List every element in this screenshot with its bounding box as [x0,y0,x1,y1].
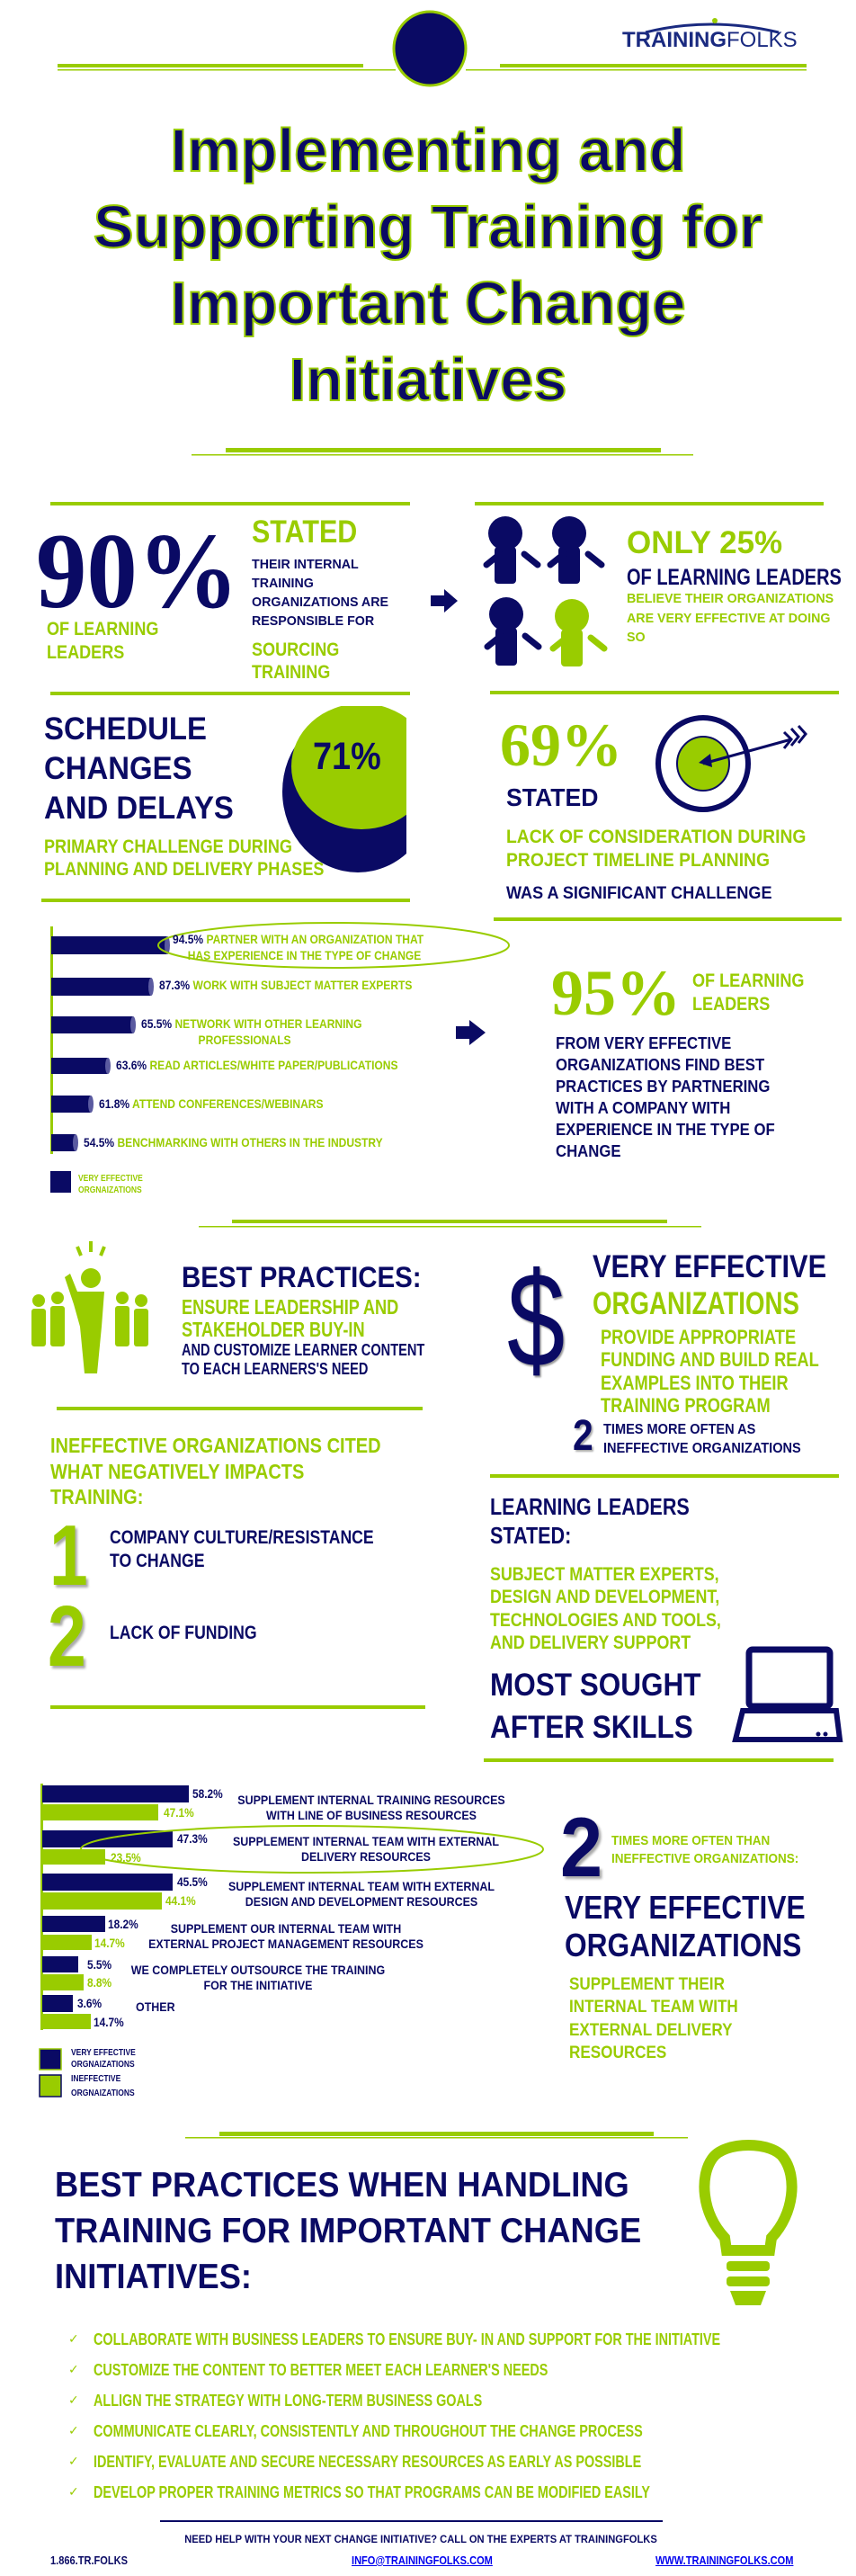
text: provide funding: EXAMPLES INTO THEIR [601,1372,789,1394]
text: find best practices: CHANGE [556,1142,621,1160]
text: times more often than: INEFFECTIVE ORGANIZATIONS: [611,1851,798,1866]
text: of learning leaders: LEADERS [47,642,124,663]
text: lack of consideration: PROJECT TIMELINE PLANNING [506,850,770,871]
text: 23.5% [111,1850,141,1865]
heading: best practices when handling: BEST PRACTICES WHEN HANDLING [55,2166,629,2205]
text: 8.8% [87,1975,111,1990]
text: times more often than [611,1833,798,1866]
text: find best practices: PRACTICES BY PARTNERING [556,1078,770,1096]
bar chart 2 category labels [131,1793,505,2014]
text: believe: BELIEVE THEIR ORGANIZATIONS [627,591,834,606]
bar chart 2 value labels [77,1786,223,2029]
title underline [192,448,693,455]
text: internal training: ORGANIZATIONS ARE [252,595,388,610]
text: 14.7% [94,2015,124,2029]
text: find best practices: EXPERIENCE IN THE TYPE OF [556,1121,775,1139]
title: Supporting Training for [94,193,762,261]
text: find best practices: ORGANIZATIONS FIND BEST [556,1056,764,1074]
bar label 2: 87.3% WORK WITH SUBJECT MATTER EXPERTS [159,978,412,992]
text: supplement their: INTERNAL TEAM WITH [569,1998,738,2017]
legend text 2: ORGNAIZATIONS [71,2089,135,2098]
heading: learning leaders stated: STATED: [490,1522,571,1549]
text: skills list [490,1564,721,1653]
stat: 69%: 69% [500,711,622,779]
text: COLLABORATE WITH BUSINESS LEADERS TO ENSURE BUY- IN AND SUPPORT FOR THE INITIATIVE [94,2330,720,2348]
text: ensure leadership: ENSURE LEADERSHIP AND [182,1295,398,1319]
section lines [41,502,842,2139]
legend 2 [40,2049,61,2097]
icon: laptop [736,1650,840,1740]
bar label 3: PROFESSIONALS [199,1033,291,1047]
checklist [68,2330,720,2501]
heading: schedule changes: AND DELAYS [44,791,234,826]
icon: top navy circle [394,12,466,85]
text: primary challenge [44,836,324,880]
legend text 1: ORGNAIZATIONS [78,1185,142,1195]
text: company culture: COMPANY CULTURE/RESISTANCE [110,1527,374,1548]
heading: very effective organizations 2: ORGANIZATIONS [565,1927,801,1963]
text: times more often as [603,1422,801,1456]
text: find best practices: FROM VERY EFFECTIVE [556,1034,731,1052]
icon: dollar: $ [507,1244,565,1395]
heading: best practices when handling: INITIATIVES: [55,2258,252,2296]
text: ✓ [68,2424,79,2438]
heading: ineffective organizations: TRAINING: [50,1485,143,1508]
text: DELIVERY RESOURCES [301,1849,431,1864]
arrow 1 [431,589,458,613]
text: ✓ [68,2455,79,2469]
text: 58.2% [192,1786,223,1801]
text: internal training: THEIR INTERNAL [252,557,359,572]
heading: learning leaders stated [490,1493,690,1549]
text: ensure leadership [182,1295,398,1341]
text: believe [627,591,834,645]
text: stated: STATED [252,514,357,550]
text: times more often than: TIMES MORE OFTEN THAN [611,1833,770,1848]
text: ✓ [68,2332,79,2347]
text: times more often as: TIMES MORE OFTEN AS [603,1422,755,1437]
number 1: 1 [49,1507,88,1604]
text: DEVELOP PROPER TRAINING METRICS SO THAT PROGRAMS CAN BE MODIFIED EASILY [94,2483,650,2501]
text: internal training: RESPONSIBLE FOR [252,613,374,629]
heading: most sought after skills [490,1668,701,1745]
text: lack of funding: LACK OF FUNDING [110,1623,257,1643]
number 2 big: 2 [560,1800,602,1894]
text: provide funding: FUNDING AND BUILD REAL [601,1348,819,1371]
text: of learning leaders 3: OF LEARNING [692,970,804,991]
bar labels 1: HAS EXPERIENCE IN THE TYPE OF CHANGE [188,948,421,962]
text: believe: ARE VERY EFFECTIVE AT DOING [627,610,830,626]
text: ✓ [68,2485,79,2500]
text: FOR THE INITIATIVE [204,1978,312,1992]
text: ensure leadership: STAKEHOLDER BUY-IN [182,1318,365,1341]
footer email: INFO@TRAININGFOLKS.COM [352,2554,493,2567]
text: customize content: TO EACH LEARNERS'S NEED [182,1360,368,1378]
footer cta: NEED HELP WITH YOUR NEXT CHANGE INITIATIVE? CALL ON THE EXPERTS AT TRAININGFOLKS [184,2533,657,2545]
text: ✓ [68,2393,79,2408]
text: skills list: DESIGN AND DEVELOPMENT, [490,1587,719,1607]
text: internal training: TRAINING [252,576,314,591]
heading: learning leaders stated: LEARNING LEADERS [490,1493,690,1520]
text: customize content [182,1341,424,1378]
text: supplement their: SUPPLEMENT THEIR [569,1975,725,1994]
heading: very effective organizations 2 [565,1889,806,1963]
heading: schedule changes: CHANGES [44,751,192,786]
text: 14.7% [94,1936,125,1950]
title: Initiatives [289,346,567,414]
heading: schedule changes [44,711,234,826]
text: supplement their: EXTERNAL DELIVERY [569,2021,732,2040]
text: company culture [110,1527,374,1571]
bar label 6: 54.5% BENCHMARKING WITH OTHERS IN THE INDUSTRY [84,1135,383,1149]
text: 18.2% [108,1917,138,1931]
text: sourcing training: SOURCING [252,640,339,660]
title: Implementing and [170,117,686,184]
text: 3.6% [77,1996,102,2010]
footer line [160,2520,663,2522]
text: SUPPLEMENT INTERNAL TRAINING RESOURCES [237,1793,505,1807]
icon: people group [486,516,604,666]
legend 1 [50,1171,71,1193]
text: sourcing training [252,640,339,683]
text: DESIGN AND DEVELOPMENT RESOURCES [245,1894,477,1909]
text: ✓ [68,2363,79,2377]
text: find best practices: WITH A COMPANY WITH [556,1099,730,1117]
text: IDENTIFY, EVALUATE AND SECURE NECESSARY RESOURCES AS EARLY AS POSSIBLE [94,2453,641,2471]
text: 44.1% [165,1893,196,1908]
bar label 3: 65.5% NETWORK WITH OTHER LEARNING [141,1016,362,1031]
bar label 5: 61.8% ATTEND CONFERENCES/WEBINARS [99,1096,324,1111]
legend text 1 [78,1174,143,1195]
text: believe: SO [627,630,646,645]
legend text 2: INEFFECTIVE [71,2074,120,2084]
bar label 3 [141,1016,362,1047]
heading: organizations green: ORGANIZATIONS [593,1286,799,1321]
callout ellipse [158,923,509,968]
heading: schedule changes: SCHEDULE [44,711,207,747]
arrow 2 [456,1020,486,1045]
text: of learning leaders 3 [692,970,804,1015]
callout ellipse 2 [81,1826,543,1873]
text: skills list: AND DELIVERY SUPPORT [490,1632,691,1653]
pie label 71%: 71% [313,735,381,778]
footer phone: 1.866.TR.FOLKS [50,2554,128,2567]
title [94,117,762,414]
text: ALLIGN THE STRATEGY WITH LONG-TERM BUSINESS GOALS [94,2392,482,2410]
text: SUPPLEMENT INTERNAL TEAM WITH EXTERNAL [233,1834,499,1848]
bar chart 2 [40,1784,189,2030]
legend text 2: ORGNAIZATIONS [71,2060,135,2070]
bar labels 1 [173,932,424,962]
text: COMMUNICATE CLEARLY, CONSISTENTLY AND THROUGHOUT THE CHANGE PROCESS [94,2422,643,2440]
text: of learning leaders 3: LEADERS [692,994,770,1015]
text: skills list: TECHNOLOGIES AND TOOLS, [490,1610,721,1631]
text: SUPPLEMENT INTERNAL TEAM WITH EXTERNAL [228,1879,495,1893]
text: provide funding [601,1326,819,1417]
text: WE COMPLETELY OUTSOURCE THE TRAINING [131,1963,385,1977]
header lines [58,64,807,70]
heading: most sought after skills: AFTER SKILLS [490,1710,693,1745]
text: internal training [252,557,388,629]
heading: very effective organizations: VERY EFFECTIVE [593,1249,826,1284]
icon: light bulb [704,2145,792,2305]
text: provide funding: TRAINING PROGRAM [601,1394,771,1417]
text: WITH LINE OF BUSINESS RESOURCES [266,1808,477,1822]
pie chart 71% [282,706,406,872]
logo arc [646,18,779,32]
heading: ineffective organizations [50,1434,381,1508]
text: 45.5% [177,1874,208,1889]
icon: green people leader [31,1241,148,1373]
text: CUSTOMIZE THE CONTENT TO BETTER MEET EACH LEARNER'S NEEDS [94,2361,548,2379]
text: lack of consideration: LACK OF CONSIDERATION DURING [506,827,806,847]
text: skills list: SUBJECT MATTER EXPERTS, [490,1564,719,1585]
number 2 green: 2 [48,1588,86,1685]
stat: 95%: 95% [551,957,681,1029]
text: of learning leaders [47,619,158,663]
text: EXTERNAL PROJECT MANAGEMENT RESOURCES [148,1936,424,1951]
bar label 4: 63.6% READ ARTICLES/WHITE PAPER/PUBLICATIONS [116,1058,398,1072]
heading: very effective organizations 2: VERY EFFECTIVE [565,1889,806,1926]
text: customize content: AND CUSTOMIZE LEARNER CONTENT [182,1341,424,1359]
heading: best practices when handling [55,2166,641,2296]
text: significant challenge: WAS A SIGNIFICANT CHALLENGE [506,884,771,903]
heading: ineffective organizations: INEFFECTIVE ORGANIZATIONS CITED [50,1434,381,1457]
bar labels 1: 94.5% PARTNER WITH AN ORGANIZATION THAT [173,932,424,946]
text: SUPPLEMENT OUR INTERNAL TEAM WITH [171,1921,401,1936]
text: primary challenge: PRIMARY CHALLENGE DURING [44,836,292,857]
text: times more often as: INEFFECTIVE ORGANIZATIONS [603,1441,801,1456]
text: stated navy: STATED [506,783,598,811]
text: 47.1% [164,1805,194,1820]
heading: most sought after skills: MOST SOUGHT [490,1668,701,1703]
text: supplement their [569,1975,738,2062]
legend text 1: VERY EFFECTIVE [78,1174,143,1184]
text: supplement their: RESOURCES [569,2044,666,2062]
title: Important Change [170,270,686,337]
heading: best practices when handling: TRAINING FOR IMPORTANT CHANGE [55,2212,641,2250]
bar chart 1 [50,926,170,1154]
text: 5.5% [87,1957,111,1972]
legend text 2: VERY EFFECTIVE [71,2048,136,2058]
icon: target with arrow [658,718,806,809]
number 2 navy: 2 [573,1412,593,1460]
text: lack of consideration [506,827,806,871]
logo: TRAININGFOLKS [622,28,798,52]
text: primary challenge: PLANNING AND DELIVERY PHASES [44,859,324,880]
heading: ineffective organizations: WHAT NEGATIVELY IMPACTS [50,1459,304,1482]
text: 47.3% [177,1831,208,1846]
stat: only 25%: ONLY 25% [627,525,782,560]
stat: 90%: 90% [36,511,239,631]
heading: best practices: BEST PRACTICES: [182,1261,422,1293]
text: OTHER [136,1999,175,2014]
text: of learning leaders: OF LEARNING [47,619,158,640]
text: provide funding: PROVIDE APPROPRIATE [601,1326,796,1348]
text: of learning leaders 2: OF LEARNING LEADERS [627,565,842,590]
legend text 2 [71,2048,136,2098]
text: find best practices [556,1034,775,1160]
text: company culture: TO CHANGE [110,1551,205,1571]
footer website: WWW.TRAININGFOLKS.COM [655,2554,793,2567]
text: sourcing training: TRAINING [252,662,330,683]
